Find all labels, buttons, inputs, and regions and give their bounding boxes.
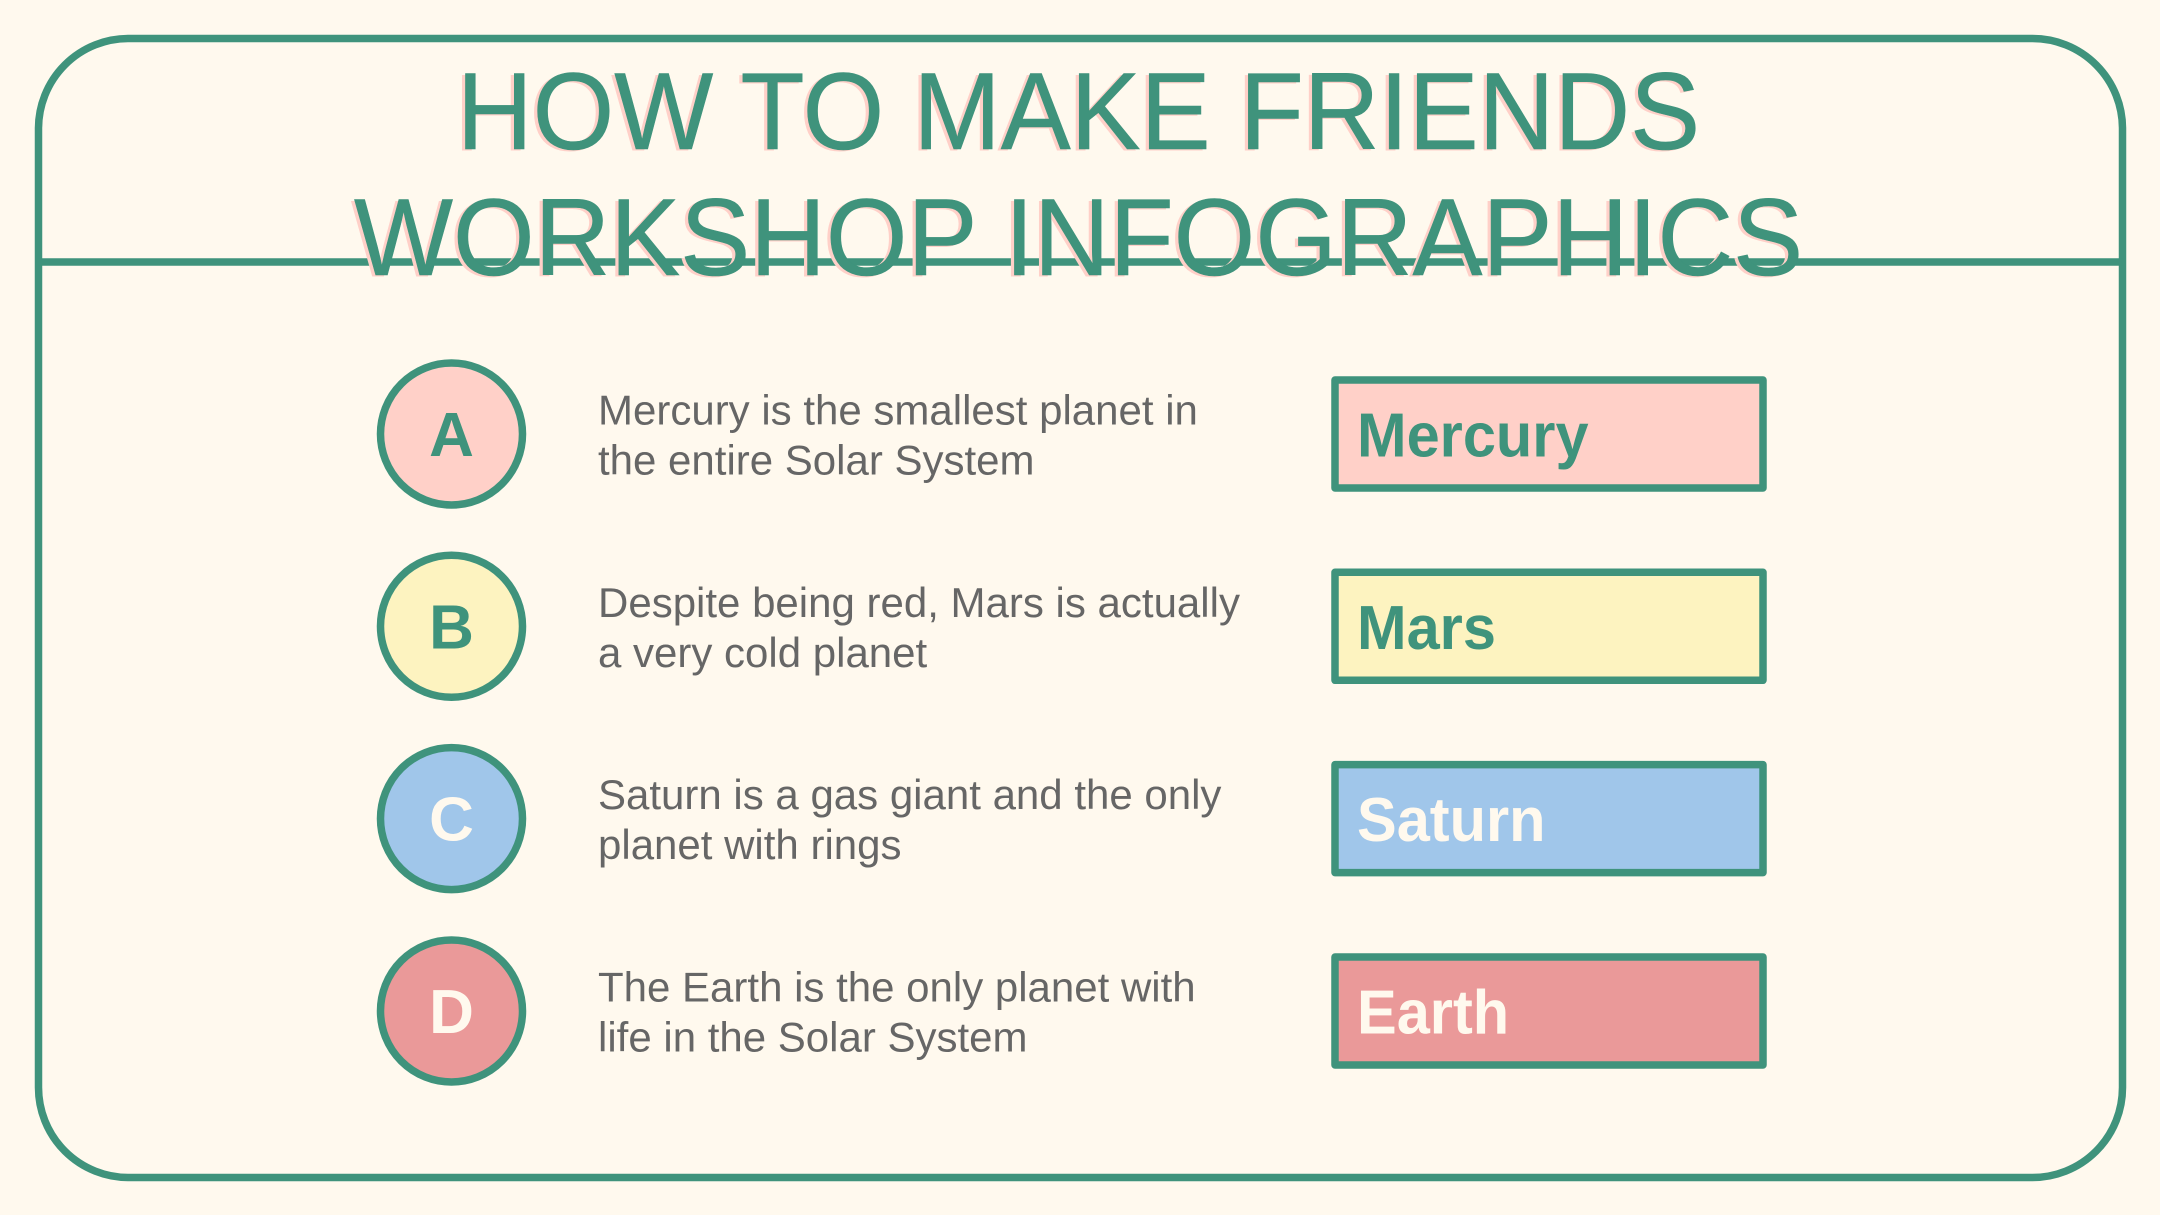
circle C: C (429, 786, 474, 855)
title: HOW TO MAKE FRIENDS (457, 50, 1700, 173)
description D: life in the Solar System (598, 1014, 1028, 1060)
label Mars: Mars (1357, 593, 1496, 662)
circle D (380, 940, 522, 1082)
label Earth: Earth (1357, 977, 1509, 1047)
row C: Saturn (380, 748, 1763, 890)
circle B: B (429, 593, 474, 662)
label Earth (1335, 957, 1763, 1065)
label Mercury: Mercury (1357, 400, 1589, 470)
label Mars (1335, 572, 1763, 680)
title: WORKSHOP INFOGRAPHICS (350, 177, 1800, 300)
circle C (380, 748, 522, 890)
title: HOW TO MAKE FRIENDS (453, 51, 1697, 174)
circle A: A (429, 401, 474, 470)
title: WORKSHOP INFOGRAPHICS (354, 176, 1803, 299)
circle B (380, 555, 522, 697)
row D: Earth (380, 940, 1763, 1082)
description D: The Earth is the only planet with (598, 964, 1196, 1010)
label Saturn: Saturn (1357, 785, 1545, 854)
description A: Mercury is the smallest planet in (598, 386, 1198, 434)
title (350, 50, 1803, 300)
row A: Mercury (380, 363, 1763, 505)
description B: Despite being red, Mars is actually (598, 579, 1240, 626)
label Mercury (1335, 380, 1763, 488)
description C: planet with rings (598, 821, 902, 868)
circle A (380, 363, 522, 505)
label Saturn (1335, 765, 1763, 873)
circle D: D (429, 978, 474, 1047)
row B: Mars (380, 555, 1763, 697)
description A: the entire Solar System (598, 436, 1035, 484)
description C: Saturn is a gas giant and the only (598, 771, 1221, 818)
description B: a very cold planet (598, 629, 928, 676)
header divider (38, 258, 2123, 266)
